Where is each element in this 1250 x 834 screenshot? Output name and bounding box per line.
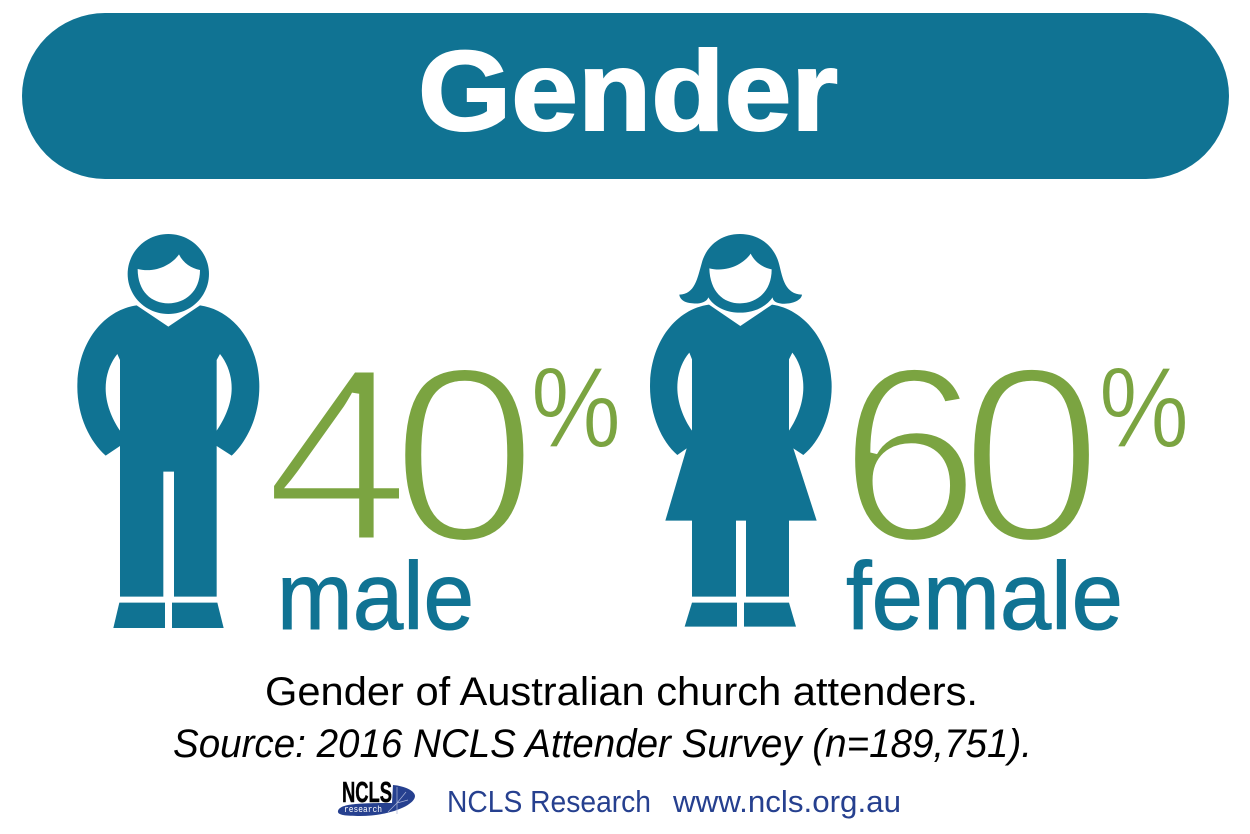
percent sign: % [531,345,621,472]
icon: male figure [77,234,259,628]
icon: female figure [650,234,832,627]
footer: website: www.ncls.org.au [672,784,901,819]
footer: organisation: NCLS Research [447,784,651,819]
title banner [22,13,1229,179]
number: 60: 6 [839,314,980,594]
number: 40: 0 [391,316,537,595]
percent sign: % [1099,345,1189,472]
stat: 60 percent female [839,314,1189,650]
number: 60: 0 [961,314,1102,594]
logo: NCLS research: research [344,805,382,815]
label: female: female [846,543,1123,650]
title: Gender [418,28,838,154]
caption: Gender of Australian church attenders. [265,670,978,714]
logo: NCLS research: NCLS [342,777,392,809]
stat: 40 percent male [264,316,621,650]
label: male: male [277,543,474,650]
source: Source: 2016 NCLS Attender Survey (n=189,751). [173,722,1032,766]
number: 40: 4 [264,316,410,595]
